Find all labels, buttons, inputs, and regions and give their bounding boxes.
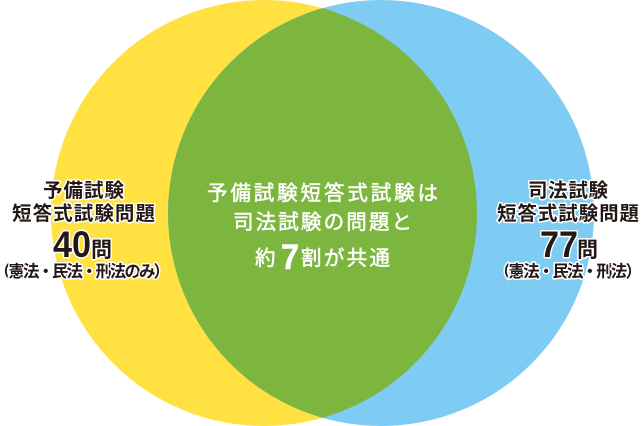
right label: bar exam 77 questions: 司法試験 [528,180,608,202]
center text: about 70% shared [207,182,438,277]
left label: preliminary exam 40 questions: 短答式試験問題 [12,202,155,225]
left label: preliminary exam 40 questions: 40 [53,224,91,265]
center text: about 70% shared: 司法試験の問題と [233,211,412,234]
left label: preliminary exam 40 questions [0,180,170,281]
center text: about 70% shared: 約 [255,247,276,270]
left label: preliminary exam 40 questions: 問 [91,239,112,262]
right label: bar exam 77 questions: 短答式試験問題 [497,202,639,225]
center text: about 70% shared: 7 [281,238,299,277]
right label: bar exam 77 questions [494,180,641,281]
center text: about 70% shared: 割が共通 [301,247,390,270]
overlap: green [168,8,477,418]
circle: yellow (preliminary exam) [51,0,477,426]
circle: blue (bar exam) [168,0,594,426]
right label: bar exam 77 questions: （憲法・民法・刑法） [494,261,641,281]
center text: about 70% shared: 予備試験短答式試験は [207,182,438,205]
left label: preliminary exam 40 questions: 予備試験 [43,180,124,202]
right label: bar exam 77 questions: 77 [540,224,578,265]
right label: bar exam 77 questions: 問 [577,239,598,262]
